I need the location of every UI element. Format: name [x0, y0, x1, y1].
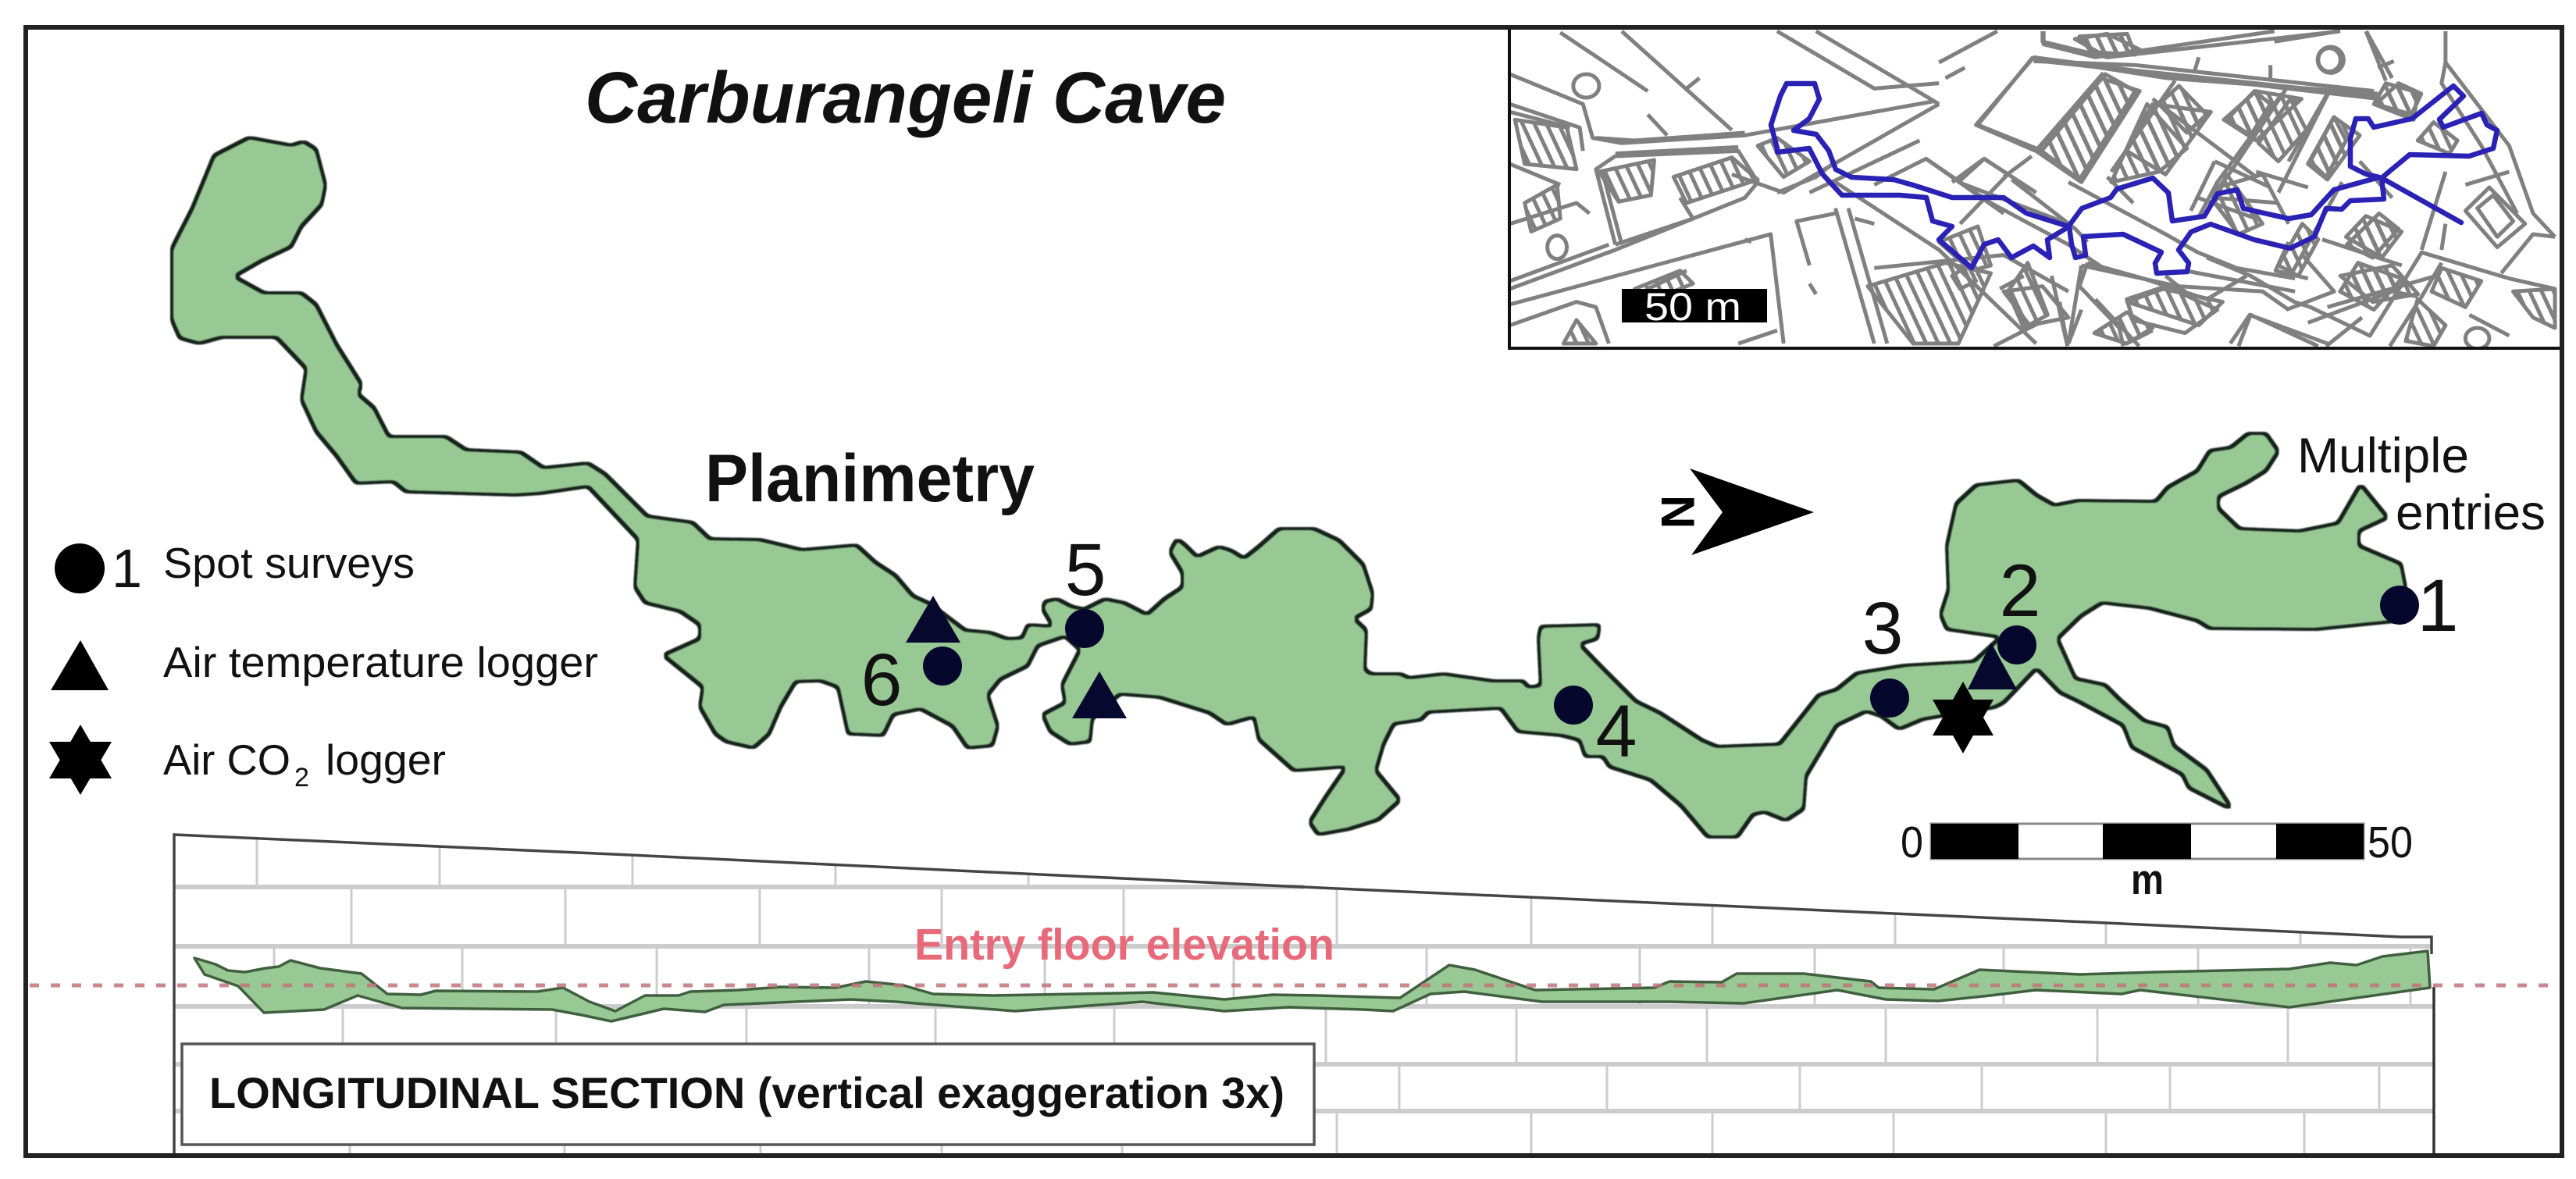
- point 4: [1554, 686, 1637, 773]
- point 5: 5: [1065, 529, 1106, 611]
- point 1: [2380, 565, 2458, 647]
- brick wall pattern: [174, 839, 2434, 1156]
- cave longitudinal profile: [194, 951, 2430, 1021]
- north arrow: [1651, 468, 1814, 555]
- survey points: [861, 529, 2458, 773]
- right section edge: [2432, 987, 2435, 1156]
- point 5: [1065, 529, 1106, 648]
- point 2: 2: [2000, 550, 2040, 632]
- entry floor elevation label: Entry floor elevation: [914, 920, 1334, 970]
- cadastral map lines: [1510, 31, 2555, 349]
- title: Carburangeli Cave: [585, 57, 1226, 138]
- point 6: 6: [861, 639, 902, 721]
- point 2: [1997, 550, 2040, 664]
- multiple entries label: Multiple: [2297, 429, 2469, 483]
- planimetry scale bar: 0: [1901, 817, 1923, 867]
- planimetry scale bar: [1901, 817, 2413, 903]
- north arrow: N: [1651, 495, 1704, 529]
- inset location map: [1509, 27, 2562, 349]
- legend: air temperature logger: Air temperature logger: [163, 638, 598, 686]
- legend: air CO2 logger: 2: [294, 763, 309, 793]
- point 6: [861, 639, 962, 721]
- cave trace on the map: [1771, 84, 2497, 273]
- legend: spot surveys: 1: [112, 538, 142, 599]
- multiple entries label: entries: [2396, 486, 2546, 540]
- planimetry scale bar: 50: [2368, 817, 2413, 867]
- inset scale bar: 50 m: [1644, 285, 1741, 329]
- point 4: 4: [1596, 690, 1637, 773]
- cave planimetry outline: [172, 137, 2406, 837]
- multiple entries label: [2297, 429, 2546, 540]
- section title box: [182, 1044, 1314, 1145]
- logger: CO2 star: [1933, 682, 1993, 753]
- ground surface outline: [174, 835, 2432, 1156]
- legend: [49, 538, 598, 795]
- point 3: 3: [1862, 587, 1903, 670]
- inset border: [1509, 27, 2562, 348]
- logger: temperature C: [1968, 643, 2017, 689]
- planimetry scale bar: m: [2131, 855, 2164, 903]
- logger: temperature B: [1072, 671, 1127, 718]
- section: longitudinal section: [30, 835, 2560, 1156]
- point 1: 1: [2417, 565, 2458, 647]
- legend: spot surveys: Spot surveys: [163, 539, 415, 587]
- point 3: [1862, 587, 1909, 718]
- legend: air CO2 logger: [49, 725, 446, 795]
- legend: spot surveys: [55, 538, 415, 599]
- inset map background: [1509, 27, 2562, 348]
- logger: temperature A: [906, 596, 960, 643]
- section title box: LONGITUDINAL SECTION (vertical exaggeration 3x): [209, 1068, 1284, 1117]
- planimetry heading: Planimetry: [705, 441, 1035, 516]
- legend: air CO2 logger: logger: [326, 736, 446, 784]
- entry floor elevation dashed line: [30, 984, 2560, 987]
- legend: air CO2 logger: Air CO: [163, 736, 290, 784]
- inset scale bar: [1622, 285, 1767, 329]
